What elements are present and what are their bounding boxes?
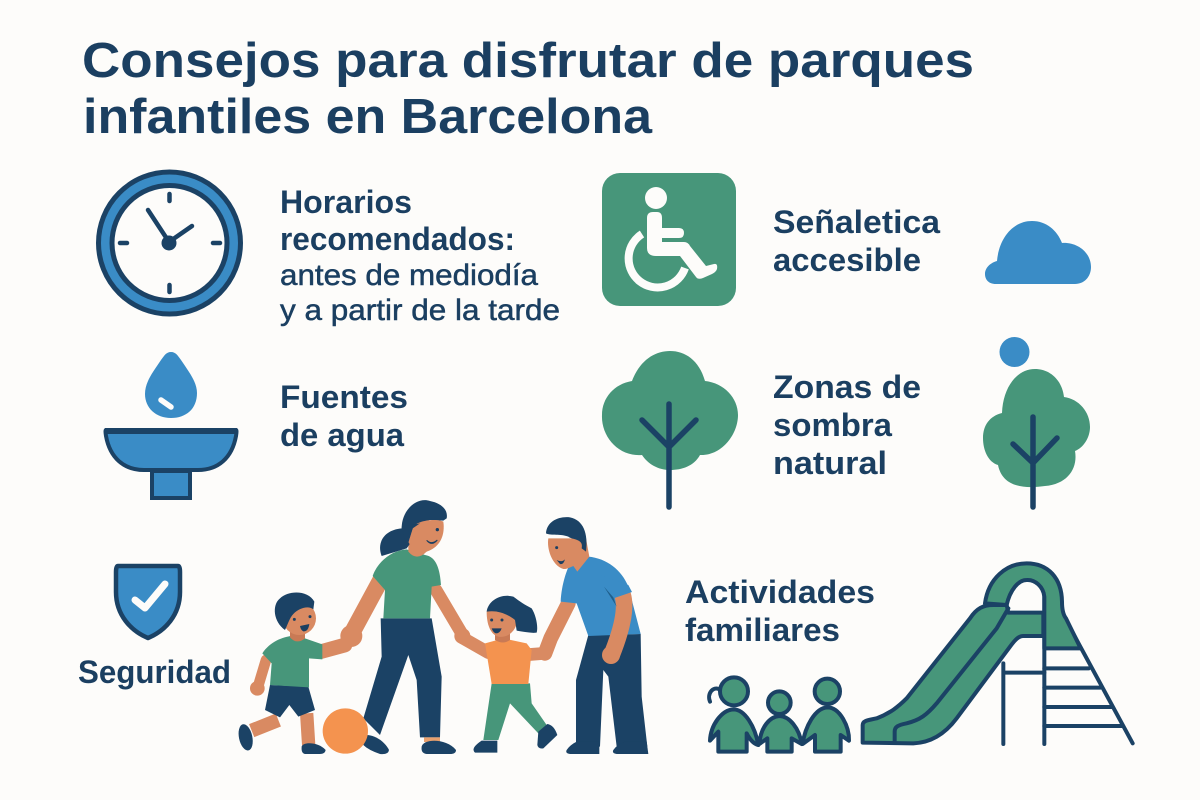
text: zonas de sombra natural: natural <box>773 445 887 481</box>
text: fuentes de agua: de agua <box>280 417 404 453</box>
figure: mother <box>340 500 470 754</box>
icon: shield <box>116 566 180 638</box>
icon: wheelchair sign <box>602 173 736 306</box>
icon: family of three <box>709 677 849 752</box>
text: horarios recomendados: recomendados: <box>280 221 515 257</box>
icon: ball <box>323 708 368 754</box>
icon: three family figures and slide <box>709 563 1133 752</box>
text: señaletica accesible <box>773 204 940 278</box>
text: seguridad: Seguridad <box>78 654 231 690</box>
text: zonas de sombra natural: sombra <box>773 407 892 443</box>
text: actividades familiares <box>685 574 875 648</box>
text: horarios recomendados: Horarios <box>280 184 412 220</box>
icon: small tree <box>983 369 1090 507</box>
text: señaletica accesible: accesible <box>773 242 921 278</box>
icon: cloud <box>985 221 1091 284</box>
text: horarios recomendados: antes de mediodía <box>280 259 538 292</box>
icon: blue dot <box>1000 337 1030 367</box>
text: horarios recomendados: y a partir de la tarde <box>280 294 560 327</box>
illustration: family playing <box>236 500 648 754</box>
text: fuentes de agua: Fuentes <box>280 379 408 415</box>
title <box>82 34 974 144</box>
figure: father <box>545 517 648 754</box>
text: zonas de sombra natural: Zonas de <box>773 369 921 405</box>
text: actividades familiares: familiares <box>685 612 840 648</box>
text: horarios recomendados <box>280 184 560 327</box>
figure: girl <box>463 596 557 753</box>
icon: clock <box>98 172 240 314</box>
text: señaletica accesible: Señaletica <box>773 204 940 240</box>
text: actividades familiares: Actividades <box>685 574 875 610</box>
text: fuentes de agua <box>280 379 408 453</box>
figure: boy <box>236 592 345 754</box>
icon: slide <box>863 563 1133 744</box>
title: infantiles en Barcelona <box>83 90 653 144</box>
text: zonas de sombra natural <box>773 369 921 481</box>
icon: water fountain <box>105 352 237 498</box>
icon: large tree <box>602 351 738 507</box>
title: Consejos para disfrutar de parques <box>82 34 974 88</box>
